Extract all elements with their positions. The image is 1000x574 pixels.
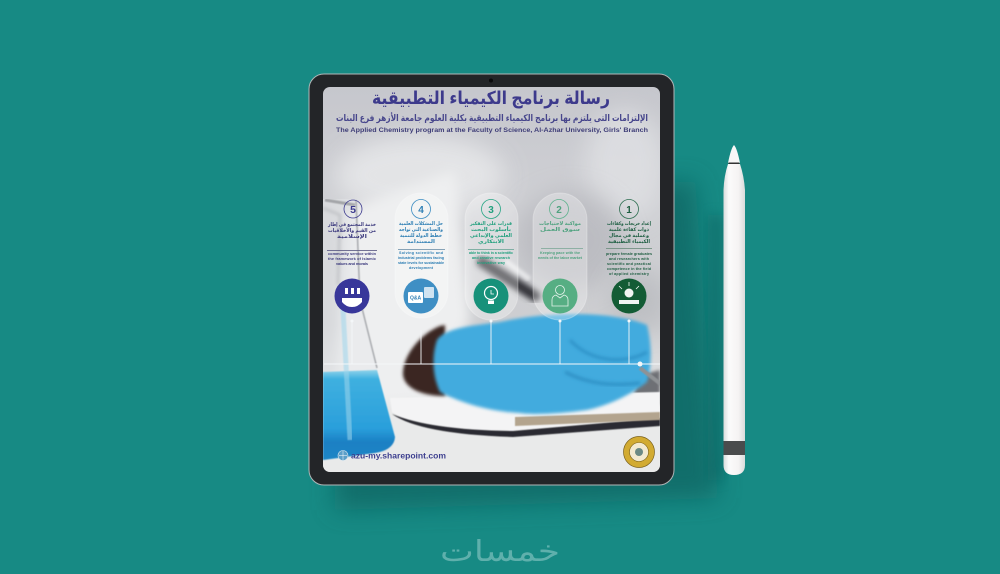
pencil shadow xyxy=(708,215,724,480)
arabic text 4: حل المشكلات العلمية xyxy=(399,221,443,227)
arabic text 4: والصناعية التي تواجه xyxy=(399,227,443,233)
english text 5: community service within xyxy=(328,251,377,256)
english text 5: values and morals xyxy=(336,261,368,266)
english text 3 xyxy=(469,251,513,265)
arabic text 4: خطط الدولة للتنمية xyxy=(400,233,442,239)
title: رسالة برنامج الكيمياء التطبيقية xyxy=(372,88,610,109)
arabic text 4: المستدامة xyxy=(407,239,435,245)
arabic text 3 xyxy=(469,221,512,245)
english text 1 xyxy=(606,252,652,276)
english text 2 xyxy=(538,252,582,259)
camera xyxy=(489,78,493,82)
number badge 2: 2 xyxy=(556,205,562,216)
arabic text 3: الابتكاري xyxy=(478,239,504,245)
number badge 1: 1 xyxy=(626,205,632,216)
dark sleeve xyxy=(403,325,445,396)
timeline dots xyxy=(350,320,642,366)
icon: globe xyxy=(338,450,348,460)
arabic text 1: وعملية في مجال xyxy=(609,233,649,239)
number badge 5: 5 xyxy=(350,204,356,216)
number badge 4: 4 xyxy=(418,205,424,216)
english text 2: Keeping pace with the xyxy=(540,251,580,255)
screen xyxy=(323,87,670,472)
column 3 xyxy=(468,200,514,314)
english text 5 xyxy=(328,252,376,265)
column 4 xyxy=(398,200,445,314)
watermark: خمسات xyxy=(440,536,560,568)
arabic text 5: خدمة المجتمع في إطار xyxy=(327,222,376,228)
subtitle english: The Applied Chemistry program at the Faculty of Science, Al-Azhar University, Girls' Branch xyxy=(336,127,648,134)
pencil body xyxy=(724,164,745,441)
column 2 xyxy=(538,200,583,314)
english text 3: able to think in a scientific xyxy=(469,251,513,255)
icon: Q&A bubbles: Q&A xyxy=(410,296,421,302)
tablet shadow xyxy=(335,180,718,510)
photo background xyxy=(323,87,670,472)
icon: graduate xyxy=(612,278,646,314)
pencil cap xyxy=(724,455,745,475)
timeline xyxy=(324,320,660,364)
apple pencil xyxy=(724,145,745,475)
arabic text 5 xyxy=(327,222,376,240)
subtitle arabic: الإلتزامات التى يلتزم بها برنامج الكيمياء التطبيقية بكلية العلوم جامعة الأزهر فرع البنات xyxy=(336,112,648,124)
tablet body xyxy=(309,74,674,485)
arabic text 2 xyxy=(539,221,581,233)
icon: light bulb xyxy=(474,278,508,314)
arabic text 2: مواكبة لاحتياجات xyxy=(539,221,581,227)
dark area right of glove xyxy=(630,370,660,405)
pill cards xyxy=(395,193,587,320)
pencil band xyxy=(724,441,745,455)
icon: community hands xyxy=(334,278,370,314)
website link: azu-my.sharepoint.com xyxy=(351,452,446,460)
blurred pen xyxy=(482,262,535,296)
english text 4: Solving scientific and xyxy=(399,251,444,255)
english text 1: scientific and practical xyxy=(607,262,651,266)
arabic text 3: العلمي والإبداعي xyxy=(470,233,512,239)
english text 2: needs of the labor market xyxy=(538,256,583,260)
arabic text 1 xyxy=(607,221,651,245)
column 1 xyxy=(606,200,652,314)
english text 4: state levels for sustainable xyxy=(398,261,444,265)
icon: person xyxy=(542,278,578,314)
arabic text 3: قدرات على التفكير xyxy=(469,221,512,227)
english text 4: industrial problems facing xyxy=(398,256,444,260)
arabic text 4 xyxy=(399,221,443,245)
arabic text 5: من القيم والأخلاقيات xyxy=(328,227,376,234)
paper and clipboard xyxy=(390,392,660,432)
arabic text 1: الكيمياء التطبيقية xyxy=(608,239,650,245)
arabic text 1: إعداد خريجات وكفاءات xyxy=(607,221,651,227)
english text 1: competence in the field xyxy=(607,267,652,271)
english text 5: the framework of Islamic xyxy=(328,256,377,261)
number badge 3: 3 xyxy=(488,205,494,216)
column 5 xyxy=(327,200,377,314)
pencil tip xyxy=(728,145,740,163)
arabic text 2: سوق العمل xyxy=(540,227,580,233)
blue glove xyxy=(434,314,651,414)
english text 1: and researchers with xyxy=(609,257,650,261)
english text 4 xyxy=(398,251,444,270)
flask xyxy=(323,199,340,345)
english text 4: development xyxy=(409,266,434,270)
english text 3: innovative way xyxy=(477,261,506,265)
arabic text 1: ذوات كفاءة علمية xyxy=(609,227,649,233)
english text 1: prepare female graduates xyxy=(606,252,652,256)
english text 3: and creative research xyxy=(472,256,511,260)
logo seal xyxy=(624,436,654,468)
tablet xyxy=(309,74,674,485)
arabic text 3: بأسلوب البحث xyxy=(471,226,511,233)
arabic text 5: الإسلامية xyxy=(337,234,367,240)
english text 1: of applied chemistry xyxy=(609,272,650,276)
